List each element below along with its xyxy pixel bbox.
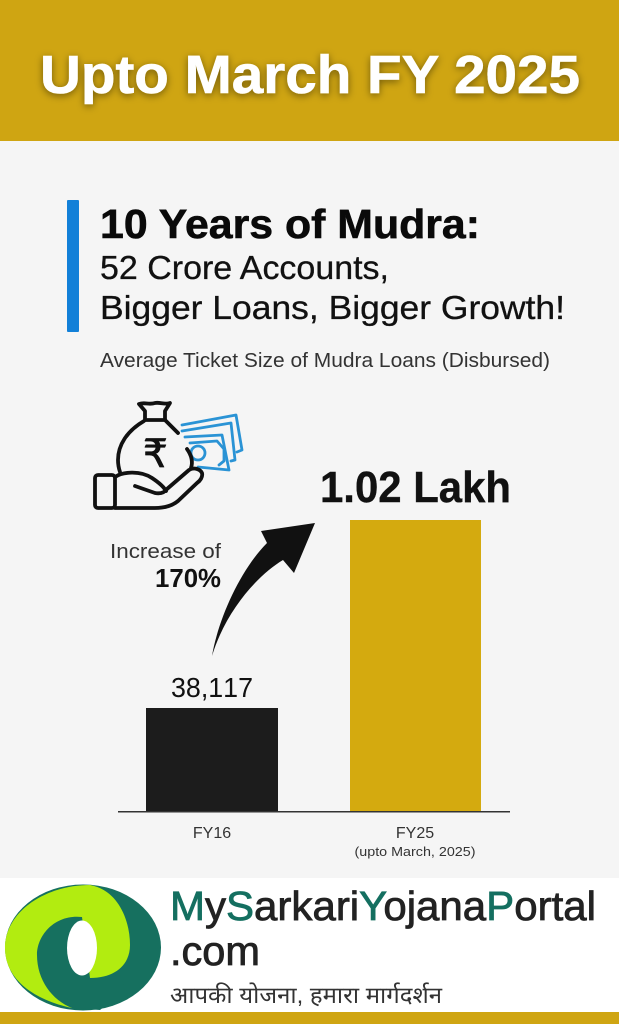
axis label: FY16: FY16 [193,825,231,842]
value: FY16: 38,117 [171,672,253,703]
arrow [212,523,315,656]
axis note: FY25: (upto March, 2025) [354,844,476,859]
accent bar [67,200,79,332]
heading line 3: Bigger Loans, Bigger Growth! [100,289,565,326]
axis label: FY25: FY25 [396,825,434,842]
icon: money bag in hand with banknotes [95,403,242,508]
subtitle: Average Ticket Size of Mudra Loans (Disbursed) [100,350,550,372]
title: Upto March FY 2025 [40,45,580,105]
header band [0,0,619,141]
money bag [118,403,192,472]
footer gold strip [0,1012,619,1024]
logo ring [5,884,161,1010]
site domain: .com [170,928,260,974]
tagline: आपकी योजना, हमारा मार्गदर्शन [170,982,443,1008]
panel: main chart background [0,141,619,878]
value: FY25: 1.02 Lakh [320,463,511,512]
increase value: 170% [155,563,221,593]
increase label [110,541,221,593]
increase text: Increase of [110,541,221,563]
bar: FY25 [350,520,481,812]
bar chart [118,463,511,859]
hand [95,469,202,508]
heading block [67,200,565,332]
site name: MySarkariYojanaPortal [170,883,596,929]
rupee sign: ₹ [143,432,168,477]
heading line 2: 52 Crore Accounts, [100,249,389,286]
heading line 1: 10 Years of Mudra: [100,201,480,247]
footer panel [0,878,619,1024]
banknotes [182,415,242,470]
bar: FY16 [146,708,278,812]
